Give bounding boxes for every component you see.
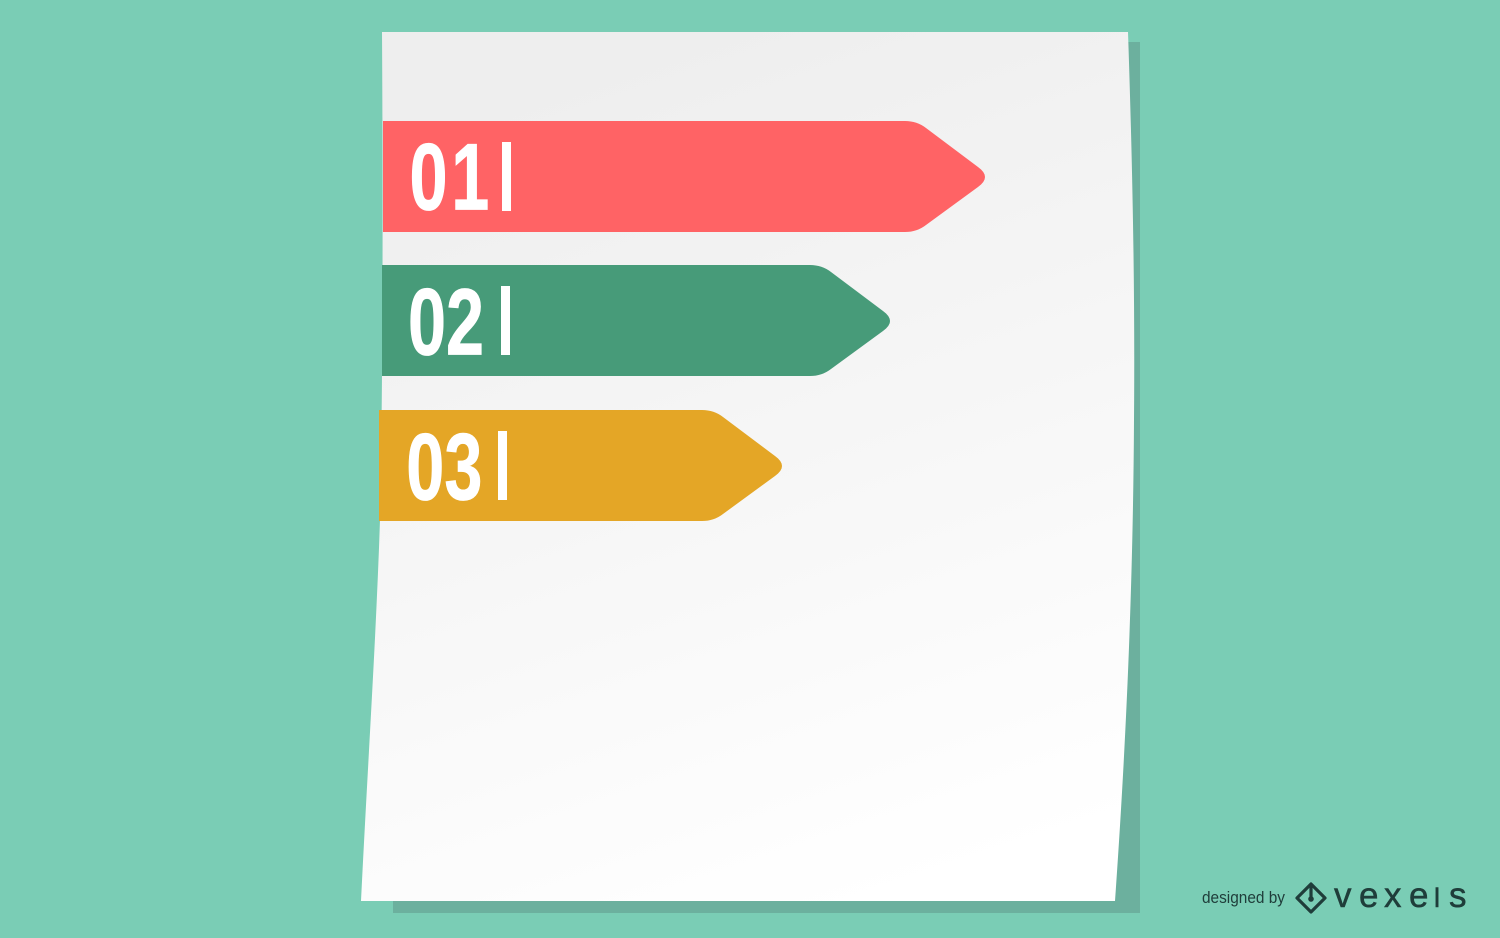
number 03: 03 [406,413,482,520]
vexels wordmark: v [1334,876,1352,915]
vexels wordmark: e [1359,876,1378,915]
banner 03 [379,410,782,521]
number 02: 02 [408,268,484,375]
number 01: 0 [410,123,448,230]
vexels wordmark: l [1434,883,1440,913]
divider bar [501,286,510,355]
divider bar [498,431,507,500]
designed by label: designed by [1202,888,1285,907]
watermark: designed by vexels [1202,876,1466,915]
vexels wordmark: s [1449,876,1466,915]
paper sheet [361,32,1134,901]
number 01: 1 [451,123,489,230]
banner 01 [383,121,985,232]
arrow shape: red [383,121,985,232]
arrow shape: amber [379,410,782,521]
vexels wordmark: x [1384,876,1402,915]
arrow shape: green [382,265,890,376]
icon: vexels diamond [1297,884,1325,912]
vexels wordmark: e [1409,876,1428,915]
paper shadow [393,42,1140,913]
banner 02 [382,265,890,376]
divider bar [502,142,511,211]
